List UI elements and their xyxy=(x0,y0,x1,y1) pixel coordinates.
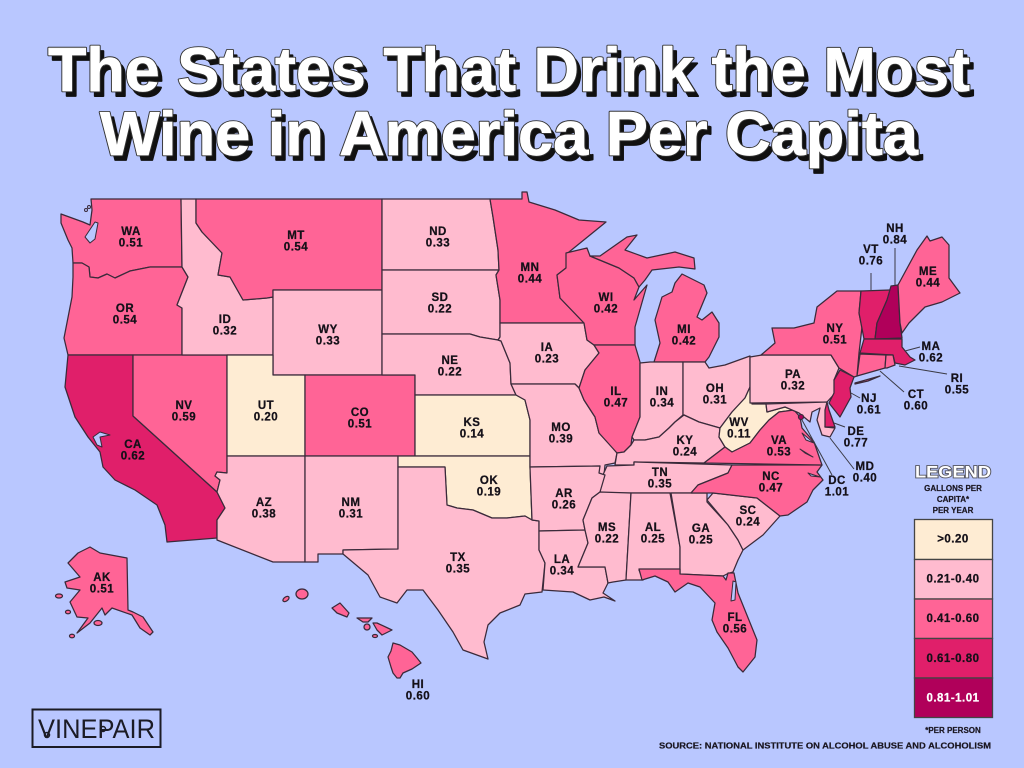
state: Iowa: 0.23 xyxy=(535,354,559,366)
state: Virginia: VA xyxy=(771,435,787,447)
territory: District of Columbia xyxy=(798,414,849,499)
state: New York: NY xyxy=(827,323,843,335)
state: New Mexico: NM xyxy=(342,497,360,509)
state: South Dakota xyxy=(382,270,500,340)
state: Wyoming xyxy=(273,290,382,375)
state: Maine: 0.44 xyxy=(916,278,940,290)
state: North Dakota: ND xyxy=(429,226,447,238)
state: Missouri: MO xyxy=(551,422,571,434)
state: Minnesota: MN xyxy=(521,262,539,274)
state: Nevada: NV xyxy=(176,400,192,412)
state: Utah: 0.20 xyxy=(254,412,278,424)
state: Delaware: 0.77 xyxy=(844,438,868,450)
state: Connecticut: CT xyxy=(908,389,924,401)
state: Kansas: KS xyxy=(464,417,480,429)
state: Indiana xyxy=(632,362,683,440)
state: New York: 0.51 xyxy=(823,335,847,347)
state: Massachusetts xyxy=(860,339,943,365)
state: Iowa xyxy=(498,323,599,388)
title xyxy=(48,36,974,174)
title: Wine in America Per Capita xyxy=(104,105,923,174)
state: Michigan: 0.42 xyxy=(672,336,696,348)
state: Arizona xyxy=(215,456,305,562)
state: Mississippi xyxy=(578,492,631,583)
state: Colorado xyxy=(305,375,415,456)
state: Tennessee: 0.35 xyxy=(648,479,672,491)
state: Oklahoma: 0.19 xyxy=(477,487,501,499)
state: Oklahoma: OK xyxy=(480,475,498,487)
state: Colorado: CO xyxy=(351,407,369,419)
state: Washington: 0.51 xyxy=(119,238,143,250)
state: Michigan xyxy=(590,235,719,362)
title: Wine in America Per Capita xyxy=(100,100,919,169)
state: Nebraska: 0.22 xyxy=(438,367,462,379)
state: Louisiana: LA xyxy=(554,554,570,566)
state: West Virginia xyxy=(719,387,794,452)
state: Massachusetts: 0.62 xyxy=(919,353,943,365)
state: Ohio: OH xyxy=(706,383,724,395)
state: South Dakota: 0.22 xyxy=(428,304,452,316)
state: Washington: WA xyxy=(121,226,141,238)
state: Pennsylvania xyxy=(750,355,839,403)
state: Vermont: 0.76 xyxy=(859,256,883,268)
state: Vermont xyxy=(859,244,891,339)
title: The States That Drink the Most xyxy=(52,41,974,110)
legend scale boxes xyxy=(914,520,992,718)
state: California xyxy=(65,355,225,542)
legend scale boxes: 0.41-0.60 xyxy=(926,613,980,625)
state: Mississippi: MS xyxy=(598,522,616,534)
title: The States That Drink the Most xyxy=(48,36,970,105)
state: Alabama xyxy=(626,493,680,580)
state: Delaware: DE xyxy=(848,426,864,438)
state: Illinois xyxy=(579,345,640,453)
state: Maryland: MD xyxy=(856,461,874,473)
state: Nebraska: NE xyxy=(442,355,458,367)
state: California: 0.62 xyxy=(121,451,145,463)
state: Alaska xyxy=(56,547,153,638)
state: Ohio: 0.31 xyxy=(703,395,727,407)
state: New Hampshire xyxy=(875,223,907,339)
state: Idaho: ID xyxy=(219,314,231,326)
state: Maine: ME xyxy=(919,266,937,278)
legend xyxy=(914,464,992,718)
state: Arizona: 0.38 xyxy=(252,509,276,521)
state: Oklahoma xyxy=(398,456,532,520)
state: South Carolina: SC xyxy=(740,505,756,517)
state: Louisiana xyxy=(539,530,615,601)
state: Idaho xyxy=(177,199,273,355)
state: Nebraska xyxy=(382,334,516,395)
source: SOURCE: NATIONAL INSTITUTE ON ALCOHOL ABUSE AND ALCOHOLISM xyxy=(659,742,991,750)
state: Montana: MT xyxy=(287,230,305,242)
state: Georgia: 0.25 xyxy=(689,535,713,547)
state: Georgia: GA xyxy=(692,523,710,535)
state: Florida: 0.56 xyxy=(723,624,747,636)
state: North Carolina: NC xyxy=(762,471,780,483)
state: South Carolina: 0.24 xyxy=(736,517,760,529)
state: Massachusetts: MA xyxy=(922,341,940,353)
state: Montana xyxy=(196,199,382,300)
state: Texas xyxy=(343,467,545,659)
title: Wine in America Per Capita xyxy=(100,100,919,169)
footnote: *PER PERSON xyxy=(925,726,981,735)
territory: District of Columbia: DC xyxy=(828,475,846,487)
state: Indiana: 0.34 xyxy=(650,398,674,410)
state: Alabama: 0.25 xyxy=(641,534,665,546)
state: Nevada: 0.59 xyxy=(172,412,196,424)
state: Rhode Island: RI xyxy=(951,373,963,385)
state: Wisconsin: 0.42 xyxy=(594,304,618,316)
state: Alabama: AL xyxy=(645,522,661,534)
state: North Dakota: 0.33 xyxy=(426,238,450,250)
state: North Carolina: 0.47 xyxy=(759,483,783,495)
state: Ohio xyxy=(683,356,750,428)
legend subtitle: GALLONS PER xyxy=(924,484,982,493)
state: Alaska: AK xyxy=(93,572,111,584)
state: New York xyxy=(761,291,880,384)
state: Illinois: 0.47 xyxy=(604,398,628,410)
state: Michigan: MI xyxy=(677,324,691,336)
state: New Hampshire: 0.84 xyxy=(883,235,907,247)
state: Florida: FL xyxy=(727,612,743,624)
state: Washington xyxy=(61,199,182,278)
title: The States That Drink the Most xyxy=(48,36,970,105)
state: Kentucky xyxy=(615,415,725,465)
state: Kentucky: KY xyxy=(677,435,693,447)
state: South Carolina xyxy=(707,493,780,550)
state: West Virginia: 0.11 xyxy=(727,429,751,441)
state: Rhode Island xyxy=(885,355,969,397)
state: New Jersey: NJ xyxy=(861,393,877,405)
state: California: CA xyxy=(124,439,142,451)
territory: District of Columbia: 1.01 xyxy=(825,487,849,499)
state: Maryland: 0.40 xyxy=(853,473,877,485)
state: Connecticut xyxy=(857,354,928,413)
state: Kentucky: 0.24 xyxy=(673,447,697,459)
state: Iowa: IA xyxy=(541,342,553,354)
state: Wyoming: WY xyxy=(318,324,338,336)
state: New Mexico xyxy=(305,456,398,562)
state: New Hampshire: NH xyxy=(886,223,904,235)
state: Florida xyxy=(639,569,757,672)
state: Pennsylvania: 0.32 xyxy=(781,381,805,393)
legend scale boxes: 0.61-0.80 xyxy=(926,653,980,665)
state: Virginia: 0.53 xyxy=(767,447,791,459)
state: Colorado: 0.51 xyxy=(348,419,372,431)
logo: VinePair: VINEPAIR xyxy=(38,714,155,744)
state: Mississippi: 0.22 xyxy=(595,534,619,546)
state: Hawaii: 0.60 xyxy=(406,691,430,703)
state: Texas: 0.35 xyxy=(446,564,470,576)
state: Arkansas xyxy=(530,466,605,531)
state: Maryland xyxy=(766,402,877,485)
state: Oregon: OR xyxy=(116,303,134,315)
state: Nevada xyxy=(133,355,227,492)
state: North Carolina xyxy=(691,465,823,516)
legend scale boxes: 0.81-1.01 xyxy=(926,692,980,704)
state: Texas: TX xyxy=(450,552,466,564)
state: New Jersey: 0.61 xyxy=(857,405,881,417)
state: Tennessee xyxy=(600,462,732,493)
state: Indiana: IN xyxy=(656,386,668,398)
map of the United States xyxy=(56,192,969,703)
state: South Dakota: SD xyxy=(432,292,448,304)
state: Kansas xyxy=(415,395,530,456)
state: Pennsylvania: PA xyxy=(785,369,801,381)
state: Oregon xyxy=(64,263,188,355)
state: Rhode Island: 0.55 xyxy=(945,385,969,397)
legend subtitle: CAPITA* xyxy=(937,495,970,504)
state: Utah xyxy=(227,355,305,456)
state: Hawaii: HI xyxy=(412,679,424,691)
state: Missouri: 0.39 xyxy=(549,434,573,446)
state: Wisconsin xyxy=(557,248,647,345)
state: Alaska: 0.51 xyxy=(90,584,114,596)
state: Illinois: IL xyxy=(610,386,622,398)
legend scale boxes: >0.20 xyxy=(937,534,969,546)
state: New Mexico: 0.31 xyxy=(339,509,363,521)
state: Idaho: 0.32 xyxy=(213,326,237,338)
state: Wyoming: 0.33 xyxy=(316,336,340,348)
state: Hawaii xyxy=(282,589,430,703)
state: New Jersey xyxy=(829,370,881,417)
legend subtitle: PER YEAR xyxy=(933,506,974,515)
state: Delaware xyxy=(825,402,868,450)
state: North Dakota xyxy=(382,199,499,270)
state: Missouri xyxy=(511,384,617,475)
state: Arkansas: AR xyxy=(555,488,573,500)
state: Arkansas: 0.26 xyxy=(552,500,576,512)
state: Tennessee: TN xyxy=(652,467,668,479)
legend heading: LEGEND xyxy=(915,464,991,482)
state: Connecticut: 0.60 xyxy=(904,401,928,413)
state: Virginia xyxy=(704,410,822,465)
state: Utah: UT xyxy=(258,400,274,412)
legend scale boxes: 0.21-0.40 xyxy=(926,574,980,586)
state: Minnesota: 0.44 xyxy=(518,274,542,286)
state: Maine xyxy=(898,236,960,333)
state: Oregon: 0.54 xyxy=(113,315,137,327)
state: Louisiana: 0.34 xyxy=(550,566,574,578)
state: Montana: 0.54 xyxy=(284,242,308,254)
state: Wisconsin: WI xyxy=(598,292,614,304)
state: Kansas: 0.14 xyxy=(460,429,484,441)
state: Arizona: AZ xyxy=(256,497,272,509)
state: Minnesota xyxy=(490,192,606,323)
state: West Virginia: WV xyxy=(729,417,749,429)
state: Georgia xyxy=(671,493,743,576)
state: Vermont: VT xyxy=(863,244,879,256)
